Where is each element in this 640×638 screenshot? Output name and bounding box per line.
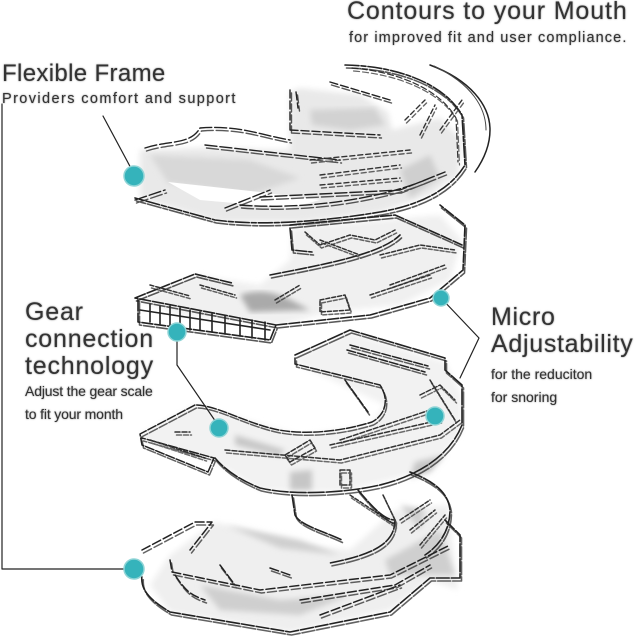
text: contours description: for improved fit and user compliance. <box>349 30 627 46</box>
heading: micro adjustability: Adjustability <box>491 330 634 358</box>
heading: gear connection technology <box>24 298 154 380</box>
layer: second gear tray <box>135 205 466 343</box>
dot: gear connection lower <box>210 419 228 437</box>
heading: gear connection technology: connection <box>25 325 154 353</box>
text: micro adjustability description: for snoring <box>491 389 557 405</box>
heading: flexible frame: Flexible Frame <box>2 60 166 87</box>
dot: gear connection upper <box>168 323 186 341</box>
leader line: micro adjustability <box>441 298 479 378</box>
dot: flexible frame <box>124 166 144 186</box>
heading: micro adjustability <box>490 303 634 358</box>
text: gear description: Adjust the gear scale <box>25 383 153 399</box>
layer: bottom tray <box>142 472 461 635</box>
marker dots <box>124 166 449 579</box>
heading: gear connection technology: Gear <box>25 298 84 326</box>
text: flexible frame description: Providers comfort and support <box>2 91 237 107</box>
text: micro adjustability description: for the reduciton <box>491 366 592 382</box>
layer: top flexible tray <box>135 65 490 226</box>
text: gear description: to fit your month <box>25 406 123 422</box>
leader line: bottom tray to left edge <box>2 104 126 569</box>
text: gear description <box>24 383 153 423</box>
layer: third gear tray <box>140 330 464 496</box>
heading: micro adjustability: Micro <box>491 303 556 331</box>
heading: gear connection technology: technology <box>25 352 154 380</box>
text: micro adjustability description <box>490 366 592 406</box>
dot: micro adjustability lower <box>426 407 444 425</box>
leader line: gear connection <box>177 340 218 425</box>
leader line: flexible frame <box>103 116 133 172</box>
dot: bottom tray <box>124 559 144 579</box>
dot: micro adjustability upper <box>433 290 449 306</box>
